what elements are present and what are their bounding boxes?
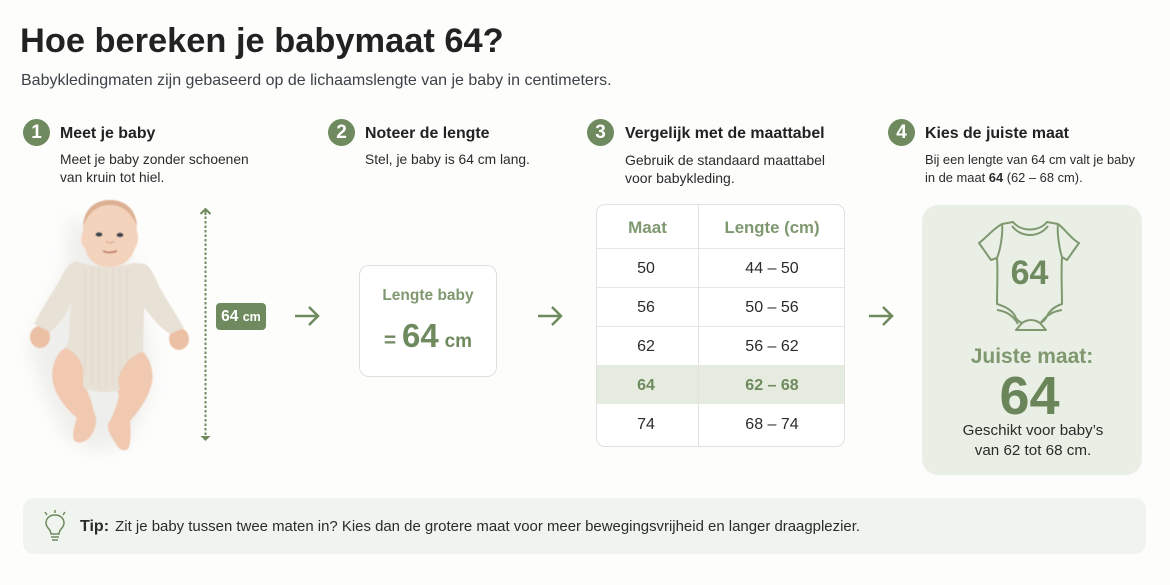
size table: 62 – 68 bbox=[745, 377, 799, 394]
step 1 header: van kruin tot hiel. bbox=[60, 170, 164, 185]
step 2 header: 2 bbox=[336, 122, 347, 143]
row lines bbox=[597, 248, 846, 249]
result note: van 62 tot 68 cm. bbox=[975, 442, 1091, 459]
step 3 header: Gebruik de standaard maattabel bbox=[625, 152, 825, 168]
step 1 header: Meet je baby bbox=[60, 125, 155, 142]
panel: result bbox=[922, 205, 1142, 475]
step 2 header: Noteer de lengte bbox=[365, 125, 490, 142]
size table: 56 – 62 bbox=[745, 338, 799, 355]
step 1 header: Meet je baby zonder schoenen bbox=[60, 152, 249, 167]
step 2 header bbox=[328, 119, 530, 167]
length badge: 64 cm bbox=[221, 308, 261, 325]
step 4 header bbox=[888, 119, 1135, 185]
step 3 header bbox=[587, 119, 825, 186]
size table: 56 bbox=[637, 299, 655, 316]
step 4 header: Kies de juiste maat bbox=[925, 125, 1069, 142]
step 1 header bbox=[23, 119, 249, 185]
size table: Lengte (cm) bbox=[724, 218, 820, 237]
arrow 3 bbox=[869, 306, 894, 326]
step 2 header: Stel, je baby is 64 cm lang. bbox=[365, 152, 530, 167]
size table: 68 – 74 bbox=[745, 416, 799, 433]
size table bbox=[596, 204, 845, 447]
rows: 50 bbox=[637, 260, 655, 277]
table header: Maat bbox=[628, 218, 667, 237]
result label: Juiste maat: bbox=[971, 345, 1093, 368]
size table: 64 bbox=[637, 377, 655, 394]
left hand bbox=[30, 326, 50, 348]
step 4 header: in de maat 64 (62 – 68 cm). bbox=[925, 170, 1083, 185]
step 3 header: Vergelijk met de maattabel bbox=[625, 125, 825, 142]
right hand bbox=[169, 328, 189, 350]
head bbox=[81, 200, 138, 267]
bodysuit bbox=[34, 261, 184, 392]
eyes and mouth bbox=[96, 232, 102, 237]
size table: 50 – 56 bbox=[745, 299, 799, 316]
size table: 62 bbox=[637, 338, 655, 355]
size table: 44 – 50 bbox=[745, 260, 799, 277]
title: Hoe bereken je babymaat 64? bbox=[20, 22, 504, 60]
tip text: Tip: Zit je baby tussen twee maten in? Kies dan de grotere maat voor meer bewegingsvrijheid en langer draagplezier. bbox=[80, 518, 860, 535]
left leg bbox=[52, 347, 96, 442]
step 1 header: 1 bbox=[31, 122, 42, 143]
step 4 header: Bij een lengte van 64 cm valt je baby bbox=[925, 152, 1135, 167]
step 3 header: 3 bbox=[595, 122, 606, 143]
step 3 header: voor babykleding. bbox=[625, 170, 735, 186]
result note: Geschikt voor baby’s bbox=[963, 422, 1103, 439]
icon: light bulb bbox=[44, 510, 66, 541]
bodysuit size: 64 bbox=[1011, 254, 1048, 292]
illustration: baby lying on back bbox=[29, 199, 190, 451]
panel: tip bbox=[23, 498, 1146, 554]
result size: 64 bbox=[999, 366, 1060, 426]
value: = 64 cm bbox=[384, 317, 472, 354]
step 4 header: 4 bbox=[896, 122, 907, 143]
panel: length note bbox=[359, 265, 497, 377]
arrow 1 bbox=[295, 306, 320, 326]
highlighted row bbox=[597, 365, 846, 404]
subtitle: Babykledingmaten zijn gebaseerd op de lichaamslengte van je baby in centimeters. bbox=[21, 72, 612, 89]
result note bbox=[963, 422, 1103, 459]
right leg bbox=[108, 352, 153, 450]
size table: 74 bbox=[637, 416, 655, 433]
measuring arrow bbox=[200, 208, 212, 441]
icon: bodysuit bbox=[978, 221, 1080, 331]
label: Lengte baby bbox=[382, 287, 474, 304]
length badge bbox=[216, 303, 266, 330]
arrow 2 bbox=[538, 306, 563, 326]
